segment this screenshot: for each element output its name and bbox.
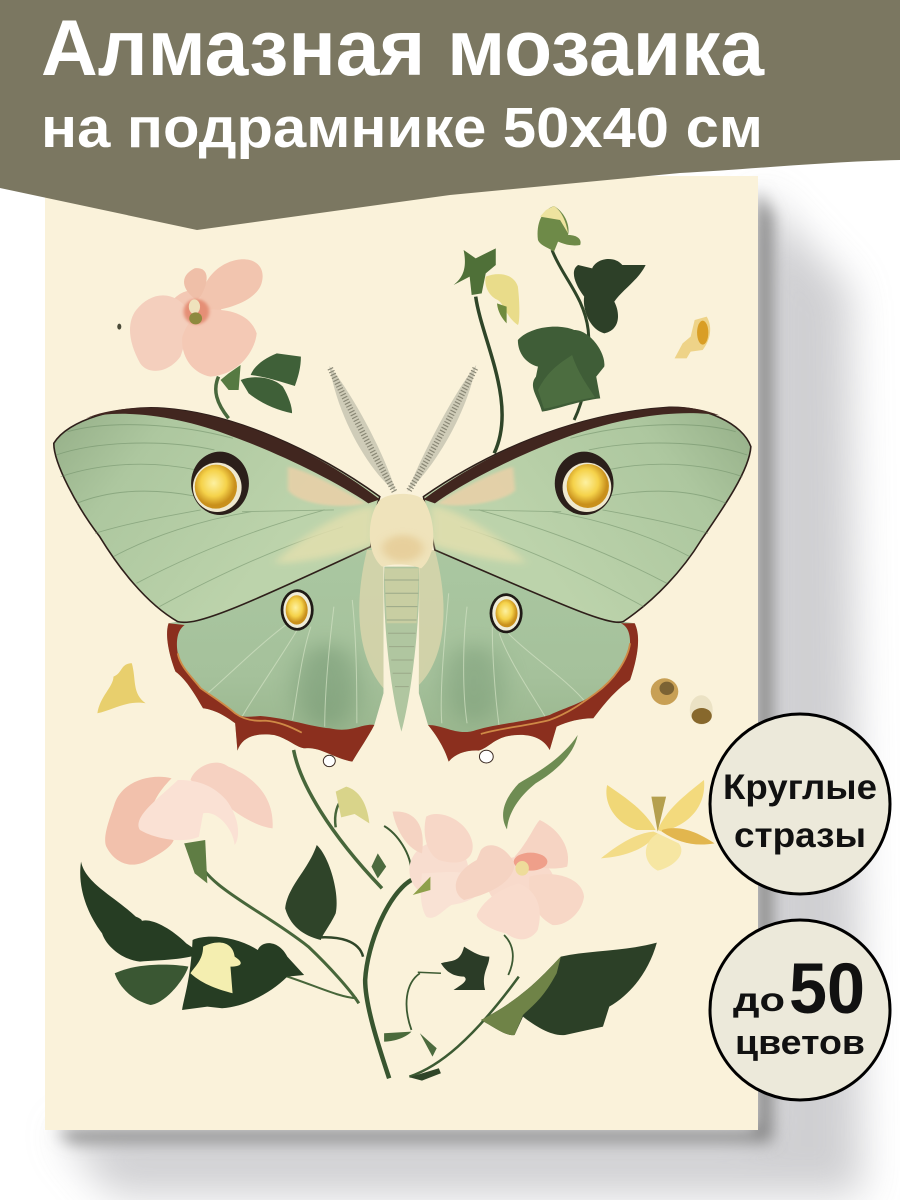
moth body [370, 494, 433, 732]
title: Алмазная мозаика [41, 3, 765, 92]
stems: upper sprigs [216, 250, 589, 453]
badge: round rhinestones [710, 714, 890, 894]
moth [54, 365, 751, 767]
title [41, 3, 765, 160]
wing eye spots [191, 452, 614, 633]
badge: up to 50 colours [710, 920, 890, 1100]
buds: lower plant [190, 787, 369, 993]
badge: up to 50 colours: 50 [789, 950, 865, 1029]
upper botanical illustration [117, 206, 710, 453]
badge: round rhinestones: Круглые [723, 768, 877, 807]
header banner [0, 0, 900, 230]
badge: up to 50 colours: до [733, 981, 785, 1018]
flowers: lower pink pair [393, 812, 584, 939]
badge: up to 50 colours: цветов [735, 1024, 865, 1062]
flower: yellow right [601, 780, 714, 871]
leaves: lower plant [80, 735, 657, 1081]
canvas artwork background [45, 176, 758, 1130]
badge: round rhinestones: стразы [734, 816, 866, 855]
canvas side shadow [55, 190, 862, 1195]
hind wing: right [419, 550, 638, 763]
flower: sweet pea left [105, 763, 273, 883]
title: на подрамнике 50х40 см [41, 96, 763, 160]
fore wing: right [423, 407, 751, 622]
small buds and seeds [97, 663, 713, 725]
stems: lower plant [197, 750, 519, 1078]
buds and leaves: upper right sprigs [117, 206, 710, 412]
flower: upper left pink [130, 259, 263, 377]
antennae [329, 365, 476, 492]
fore wing: left [54, 408, 380, 622]
lower botanical illustration [80, 735, 714, 1081]
hind wing: left [167, 547, 383, 767]
leaves: upper left pair [221, 353, 301, 413]
